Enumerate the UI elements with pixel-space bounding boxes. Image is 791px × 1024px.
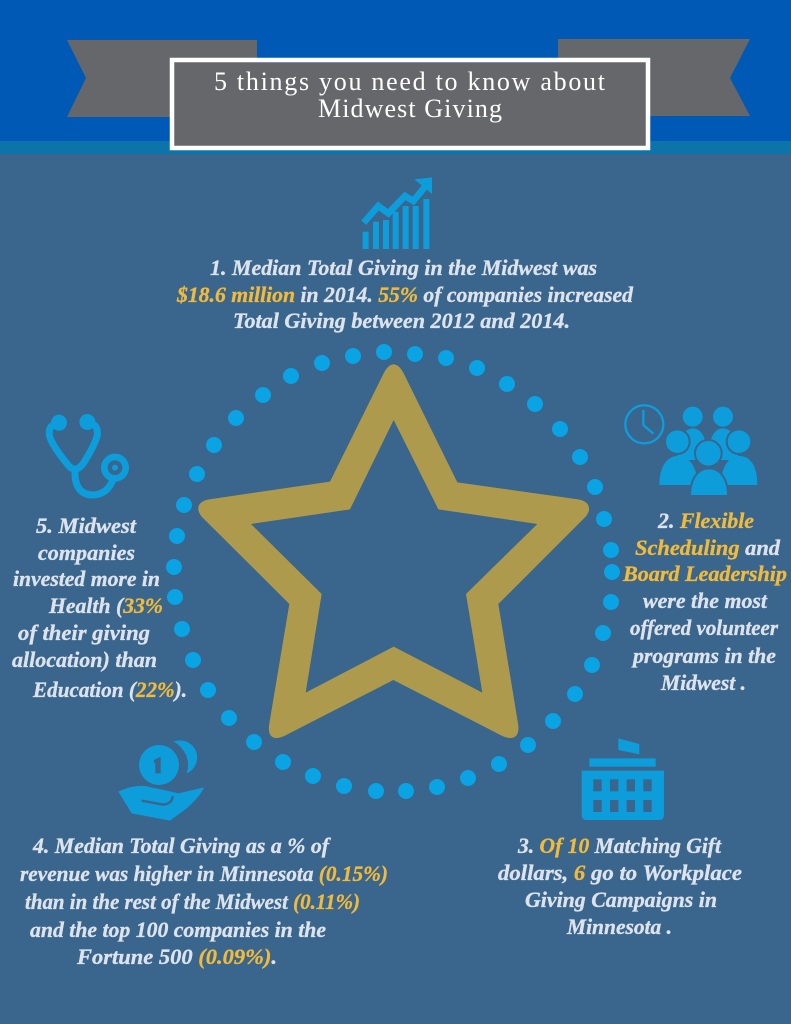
- text: item 5: invested more in: [13, 566, 160, 591]
- text: item 1: 1. Median Total Giving in the Midwest was: [210, 255, 597, 280]
- right ribbon: [558, 39, 750, 116]
- text: item 1: [176, 255, 634, 333]
- text: item 2: Board Leadership: [622, 561, 787, 586]
- title box: [172, 60, 648, 148]
- text: item 4: than in the rest of the Midwest (0.11%): [25, 889, 360, 914]
- text: item 2: offered volunteer: [630, 615, 778, 640]
- text: item 2: were the most: [643, 588, 768, 613]
- text: item 5: 5. Midwest: [36, 513, 137, 538]
- text: item 4: 4. Median Total Giving as a % of: [32, 833, 331, 858]
- text: item 3: dollars, 6 go to Workplace: [498, 860, 742, 885]
- item 4: giving as percent of revenue: [20, 740, 388, 969]
- title text: [214, 67, 606, 123]
- text: item 5: Health (33%: [48, 593, 163, 618]
- text: item 2: Scheduling and: [635, 535, 781, 560]
- text: item 4: [20, 833, 388, 969]
- item 3: matching gifts: [498, 738, 742, 939]
- text: item 5: of their giving: [18, 620, 150, 645]
- text: item 4: revenue was higher in Minnesota (0.15%): [20, 861, 388, 886]
- text: item 5: [12, 513, 187, 702]
- icon: rising bar chart: [363, 177, 432, 249]
- text: item 2: 2. Flexible: [657, 508, 754, 533]
- text: item 3: Giving Campaigns in: [525, 887, 717, 912]
- text: item 5: companies: [38, 540, 135, 565]
- dotted circle: [166, 344, 620, 799]
- left ribbon: [67, 40, 257, 117]
- text: item 3: 3. Of 10 Matching Gift: [517, 833, 722, 858]
- item 1: median total giving: [176, 177, 634, 333]
- text: item 5: Education (22%).: [32, 677, 187, 702]
- icon: hand holding coins: [118, 740, 204, 821]
- text: item 2: Midwest .: [660, 670, 746, 695]
- text: item 1: Total Giving between 2012 and 2014.: [233, 308, 570, 333]
- header panel: [0, 0, 791, 154]
- icon: building with flag: [582, 738, 664, 820]
- icon: clock and people group: [625, 405, 757, 496]
- icon: stethoscope: [49, 414, 126, 495]
- text: item 2: [622, 508, 787, 695]
- text: item 2: programs in the: [631, 643, 776, 668]
- text: item 5: allocation) than: [12, 647, 157, 672]
- item 5: health versus education: [12, 414, 187, 702]
- title text: Midwest Giving: [318, 94, 502, 123]
- item 2: volunteer programs: [622, 405, 787, 695]
- gold star outline: [198, 364, 589, 738]
- text: item 4: Fortune 500 (0.09%).: [76, 944, 277, 969]
- text: item 4: and the top 100 companies in the: [30, 917, 326, 942]
- text: item 3: [498, 833, 742, 939]
- title text: 5 things you need to know about: [214, 67, 606, 96]
- text: item 3: Minnesota .: [566, 914, 672, 939]
- text: item 1: $18.6 million in 2014. 55% of companies increased: [176, 282, 634, 307]
